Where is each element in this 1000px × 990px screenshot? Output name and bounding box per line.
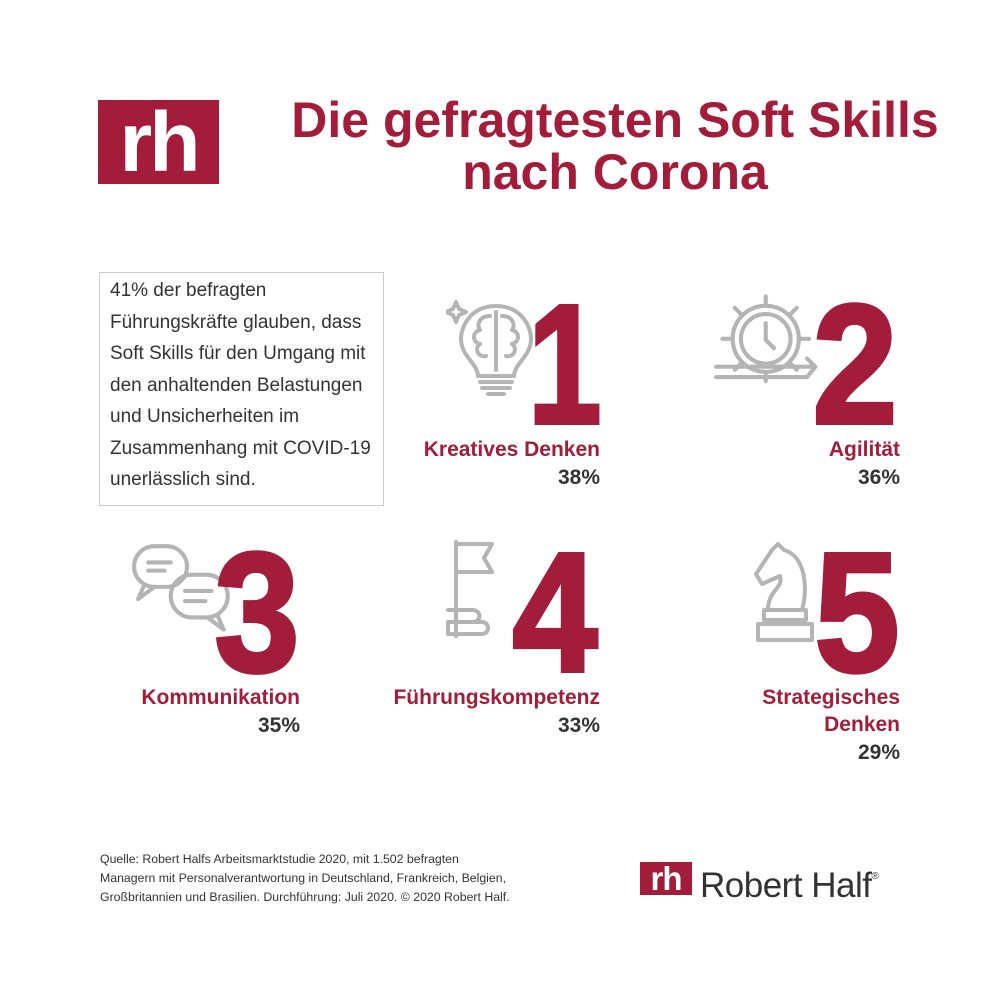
item 5: Strategisches Denken: Denken [824,713,900,736]
logo: rh square: rh [120,95,198,189]
footer source text: Quelle: Robert Halfs Arbeitsmarktstudie 2020, mit 1.502 befragten [100,852,459,866]
label: Kreatives Denken [424,438,600,461]
footer source text [100,852,510,904]
item 3: Kommunikation: Kommunikation [141,686,300,709]
number 2: 2 [813,270,898,460]
item 4: Führungskompetenz: 33% [558,714,600,737]
number 3: 3 [215,518,300,708]
number 1: 1 [528,270,602,460]
item 2: Agilität: 36% [858,466,900,489]
icon: hand with flag [446,540,494,638]
logo: rh square [98,100,219,184]
footer source text: Großbritannien und Brasilien. Durchführung: Juli 2020. © 2020 Robert Half. [100,890,510,904]
number 4: 4 [513,518,598,708]
icon: chess knight [754,542,814,642]
item 4: Führungskompetenz: Führungskompetenz [393,686,600,709]
percent: 38% [558,466,600,489]
number 5: 5 [815,518,900,708]
icon: lightbulb brain [446,300,533,396]
icon: speech bubbles [132,544,230,632]
item 5: Strategisches Denken: Strategisches [762,686,900,709]
title [291,92,939,200]
footer source text: Managern mit Personalverantwortung in Deutschland, Frankreich, Belgien, [100,871,506,885]
item 2: Agilität [714,270,900,489]
footer logo: Robert Half: rh [650,860,682,897]
item 2: Agilität: Agilität [829,438,900,461]
footer logo: Robert Half: Robert Half® [700,866,878,905]
item 3: Kommunikation: 35% [258,714,300,737]
text box: intro: 41% der befragten Führungskräfte glauben, dass Soft Skills für den Umgang mit den anhaltenden Belastungen und Unsicherheiten im Zusammenhang mit COVID-19 unerlässlich sind. [110,280,371,490]
footer logo: Robert Half [640,860,879,905]
title: Die gefragtesten Soft Skills [291,92,939,148]
item 4: Führungskompetenz [393,518,600,737]
item 1: Kreatives Denken [424,270,602,489]
item 5: Strategisches Denken: 29% [858,741,900,764]
item 5: Strategisches Denken [754,518,900,764]
item 3: Kommunikation [132,518,300,737]
title: nach Corona [462,144,768,200]
icon: gear clock arrow [714,294,818,384]
